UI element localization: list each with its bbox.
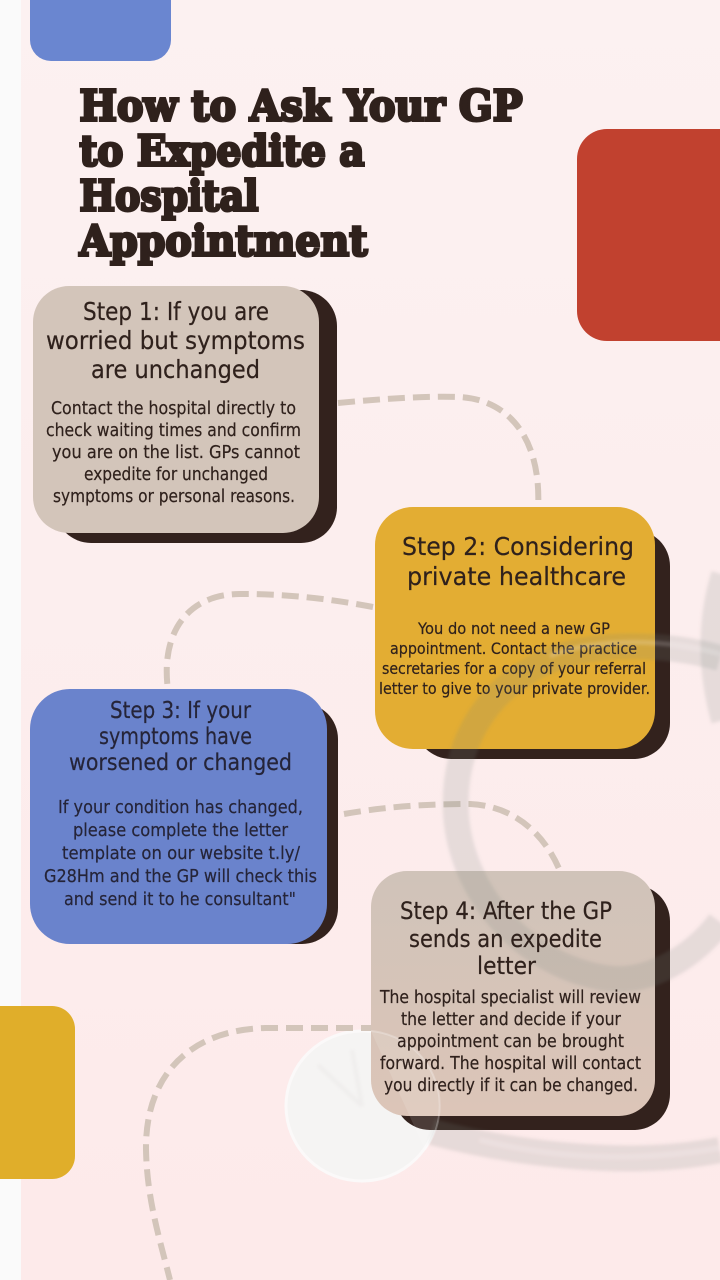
arrow: step 4 onward [146,1028,378,1280]
step 1 heading: Step 1: If you are [83,297,269,326]
step 4 body: the letter and decide if your [401,1010,622,1030]
step 1 body [46,399,301,507]
step 4 heading: sends an expedite [409,925,602,953]
step 3 body: and send it to he consultant" [64,889,296,910]
step 1 heading: are unchanged [91,355,260,384]
arrow: step 2 to step 3 [167,594,373,690]
decorative block: red [577,129,720,341]
step 2 heading [402,532,634,591]
step 1 body: check waiting times and confirm [46,421,301,441]
step 1 body: symptoms or personal reasons. [53,487,295,507]
step 3 heading: symptoms have [99,724,252,750]
arrow: step 3 to step 4 [344,804,560,871]
title: to Expedite a [80,126,364,176]
step 4 heading: letter [477,952,536,980]
step 2 heading: private healthcare [407,562,626,591]
step 1 body: expedite for unchanged [84,465,268,485]
step 4 body [379,988,641,1096]
panel: step 3 [30,689,338,944]
step 3 heading: worsened or changed [69,750,292,776]
panel: step 2 [375,507,670,759]
step 2 body: appointment. Contact the practice [390,639,637,658]
step 4 body: you directly if it can be changed. [384,1076,638,1096]
step 4 body: appointment can be brought [397,1032,624,1052]
step 3 body [44,797,317,910]
step 1 body: Contact the hospital directly to [51,399,296,419]
step 4 card shape [371,871,670,1130]
step 3 body: please complete the letter [73,820,289,841]
step 2 body [379,619,650,698]
arrow: step 1 to step 2 [338,397,538,510]
step 3 body: template on our website t.ly/ [62,843,301,864]
step 3 heading [69,698,292,776]
step 4 body: The hospital specialist will review [379,988,641,1008]
stethoscope chest piece [286,1031,438,1181]
title [79,82,523,266]
decorative block: yellow [0,1006,75,1179]
step 1 heading [46,297,305,384]
title: How to Ask Your GP [80,82,522,130]
step 2 body: You do not need a new GP [417,619,610,638]
step 4 heading: Step 4: After the GP [400,897,612,925]
title: Hospital [80,172,258,220]
decorative block: blue [30,0,171,61]
step 3 body: If your condition has changed, [58,797,303,818]
step 2 heading: Step 2: Considering [402,532,634,561]
title: Appointment [79,216,368,266]
stethoscope tubing [432,575,720,1158]
step 1 heading: worried but symptoms [46,326,305,355]
step 3 body: G28Hm and the GP will check this [44,866,317,887]
panel: step 1 [33,286,337,543]
step 2 body: letter to give to your private provider. [379,679,650,698]
step 2 body: secretaries for a copy of your referral [382,659,646,678]
step 3 heading: Step 3: If your [110,698,251,724]
step 4 text [379,897,641,1096]
step 4 body: forward. The hospital will contact [380,1054,641,1074]
step 4 heading [400,897,612,980]
step 1 body: you are on the list. GPs cannot [52,443,300,463]
chest piece showing through step 4 [371,1031,440,1150]
